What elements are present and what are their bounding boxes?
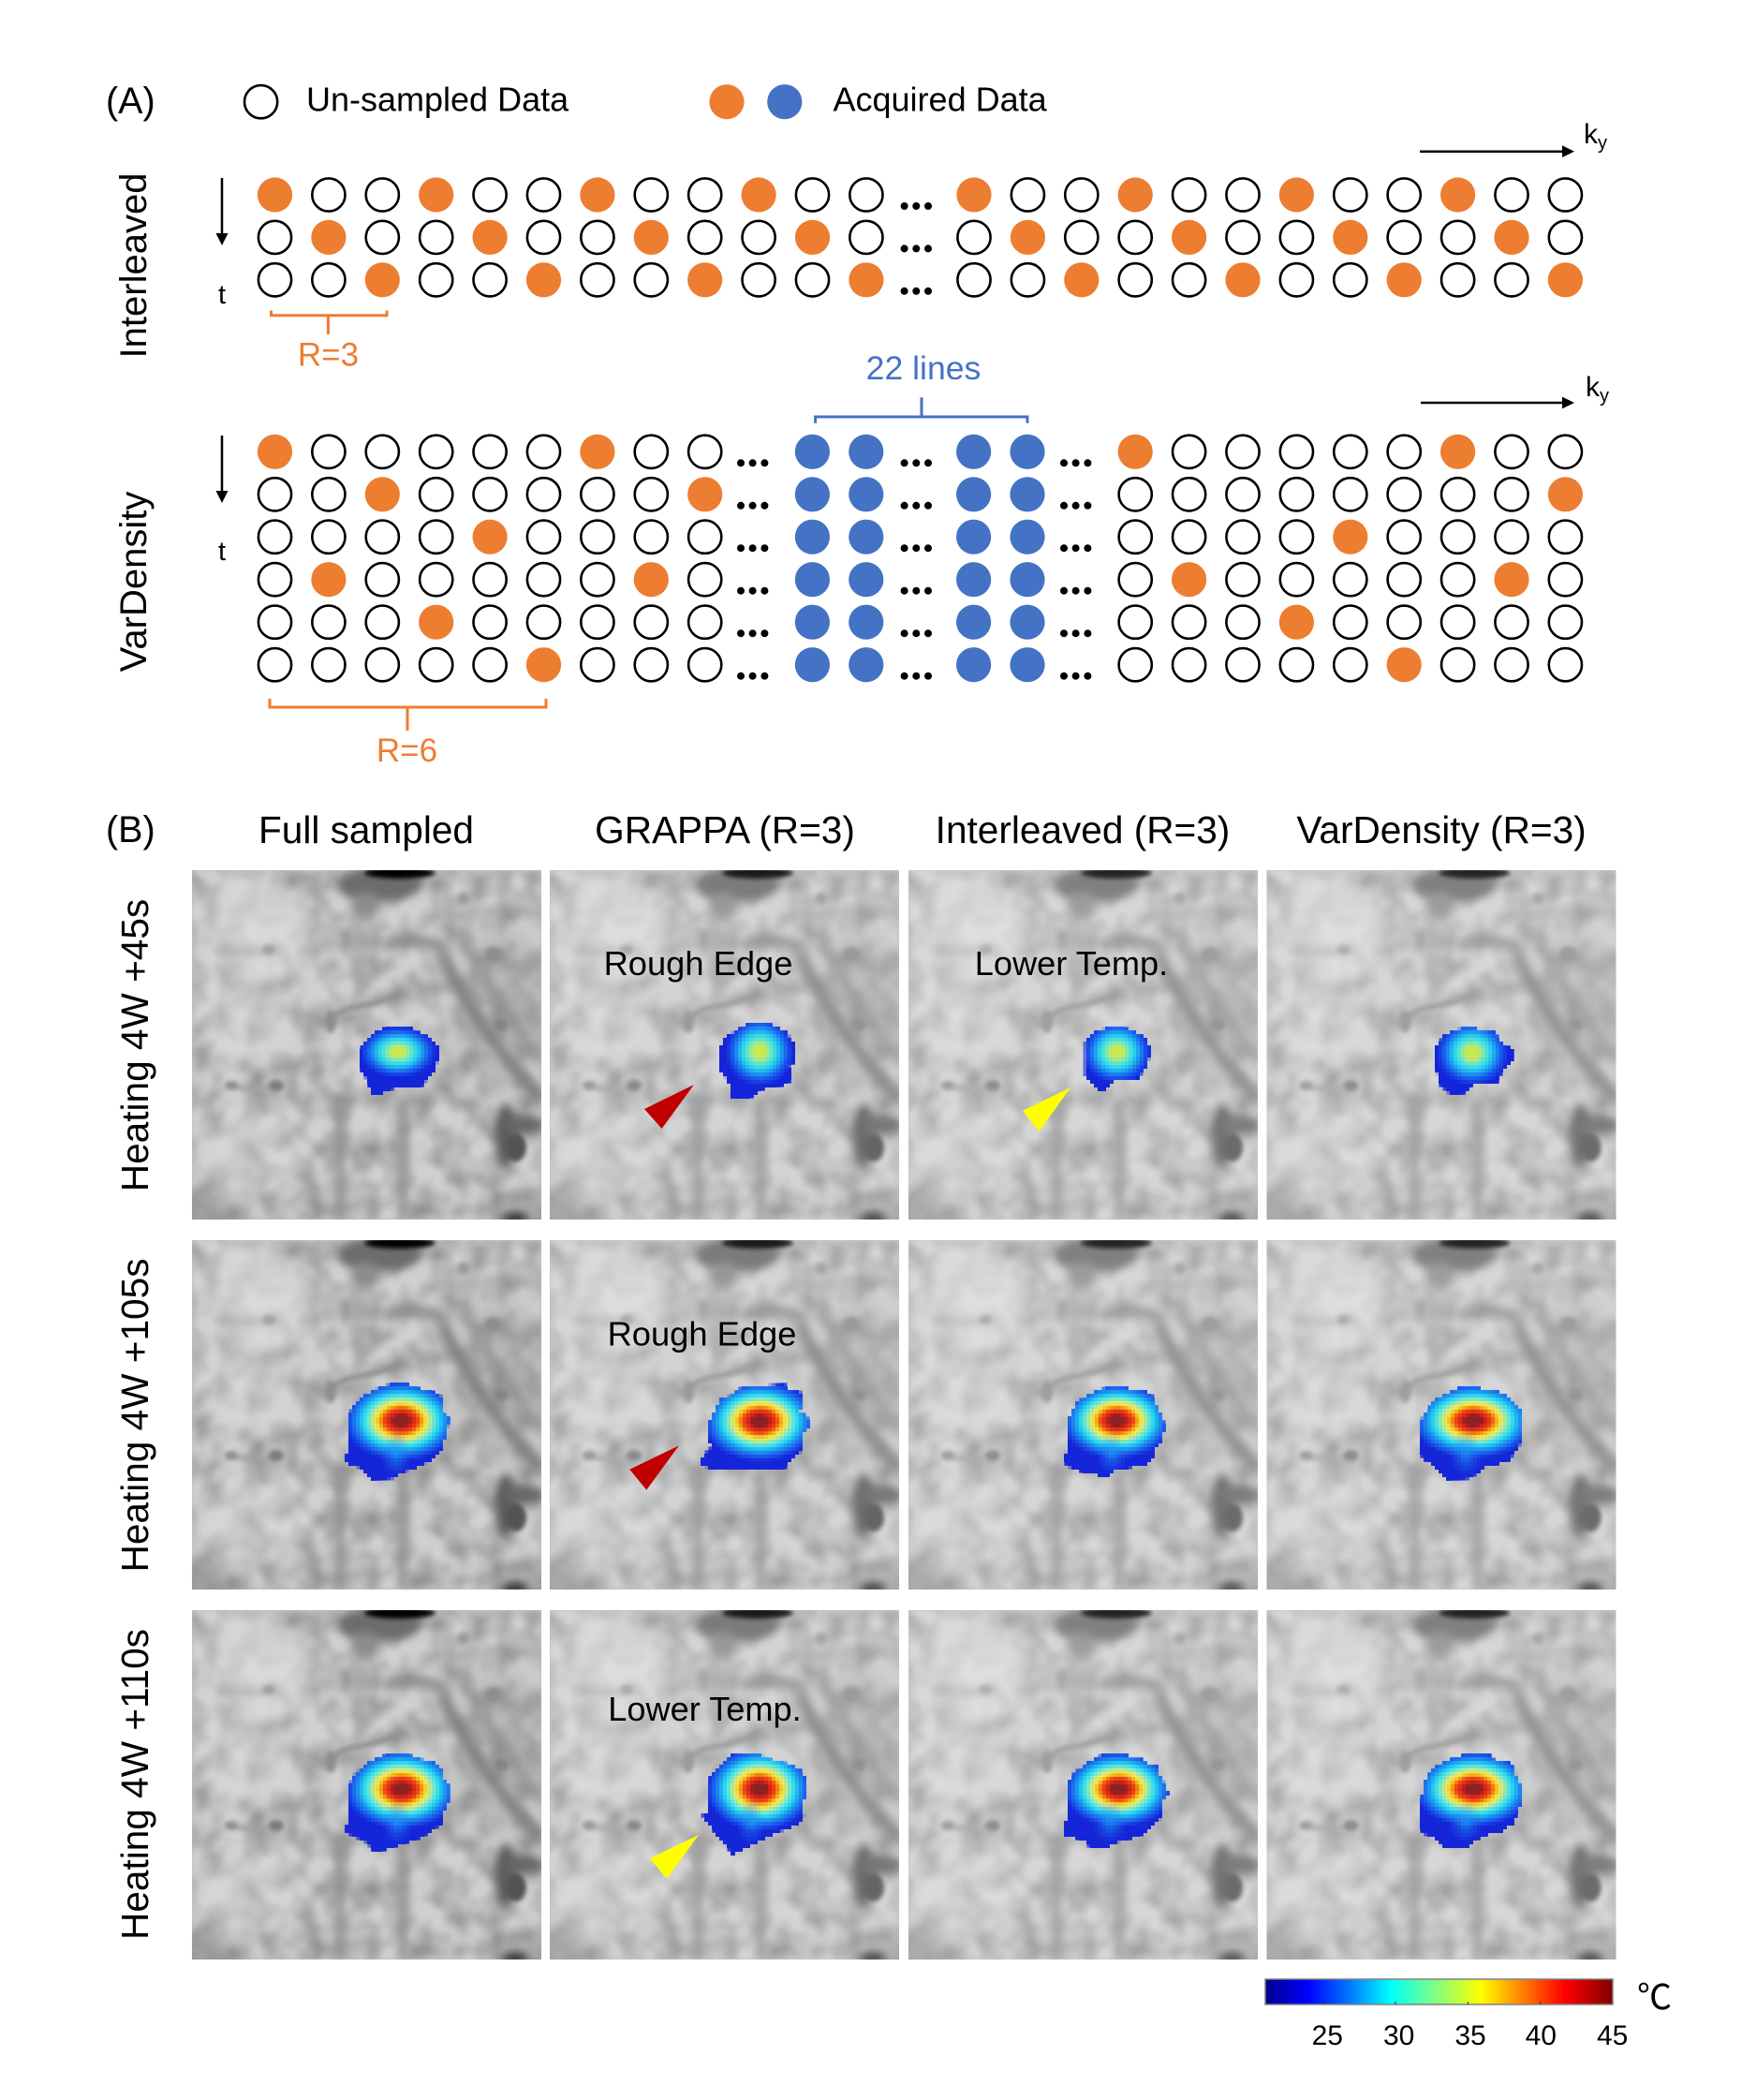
arrow: time axis xyxy=(215,178,229,310)
bracket: R=6 xyxy=(270,699,546,769)
heading: Heating 4W +45s: Heating 4W +45s xyxy=(113,899,156,1191)
colour ramp xyxy=(1265,1979,1613,2004)
image panel: +45s full sampled xyxy=(155,867,578,1242)
heading: Full sampled: Full sampled xyxy=(258,808,474,851)
heat map xyxy=(360,1028,437,1093)
heat map xyxy=(1085,1028,1151,1091)
legend: acquired data xyxy=(709,81,1048,119)
arrow: time axis: t xyxy=(218,280,226,310)
heat map xyxy=(719,1024,795,1100)
heading: VarDensity (R=3): VarDensity (R=3) xyxy=(1296,808,1587,851)
arrow: ky axis xyxy=(1421,372,1609,408)
panel label: (A): (A) xyxy=(106,81,155,122)
row label: Interleaved: Interleaved xyxy=(113,173,155,358)
bracket: R=6: R=6 xyxy=(376,732,437,769)
ellipsis dots xyxy=(741,463,1087,676)
arrowhead: yellow xyxy=(650,1835,699,1879)
heat map xyxy=(1420,1386,1523,1479)
annotation: Lower Temp.: Lower Temp. xyxy=(608,1690,802,1728)
heat map xyxy=(1065,1386,1165,1476)
bracket: 22 lines: 22 lines xyxy=(866,349,981,387)
heading: GRAPPA (R=3): GRAPPA (R=3) xyxy=(595,808,855,851)
annotation: Rough Edge: Rough Edge xyxy=(608,1315,796,1353)
image panel: +110s GRAPPA xyxy=(512,1607,936,1982)
row headings xyxy=(113,899,156,1940)
image panel: +45s GRAPPA xyxy=(512,867,936,1242)
annotation: Lower Temp.: Lower Temp. xyxy=(975,944,1168,983)
heading: Heating 4W +110s: Heating 4W +110s xyxy=(113,1629,156,1940)
legend xyxy=(244,81,1048,119)
image panel: +105s GRAPPA xyxy=(512,1237,936,1612)
image panel: +110s Interleaved xyxy=(871,1607,1294,1982)
bracket: 22 lines xyxy=(816,349,1027,423)
arrow: ky axis: y xyxy=(1600,386,1609,407)
image panel: +110s full sampled xyxy=(155,1607,578,1982)
heat map xyxy=(1420,1755,1523,1848)
arrow: ky axis: k xyxy=(1584,119,1598,150)
interleaved row 3 xyxy=(258,262,1583,297)
fully acquired central block xyxy=(795,435,1045,682)
colour bar labels xyxy=(1312,2020,1628,2051)
heat map xyxy=(1066,1755,1168,1848)
legend: un-sampled data: Un-sampled Data xyxy=(306,81,569,118)
image panel: +45s Interleaved xyxy=(871,867,1294,1242)
interleaved row 2 xyxy=(258,220,1582,255)
legend: acquired data: Acquired Data xyxy=(834,81,1048,118)
image panel: +45s VarDensity xyxy=(1229,867,1652,1242)
panel label: (B): (B) xyxy=(106,809,155,850)
interleaved row 1 xyxy=(258,177,1582,213)
colour bar xyxy=(1265,1978,1672,2051)
colour bar labels: 35 xyxy=(1454,2020,1486,2051)
image panel: +105s VarDensity xyxy=(1229,1237,1652,1612)
colour bar labels: 45 xyxy=(1597,2020,1628,2051)
bracket: R=3: R=3 xyxy=(298,337,359,373)
arrow: time axis xyxy=(215,436,229,567)
ellipsis dots xyxy=(905,206,928,291)
heat map xyxy=(346,1383,449,1479)
arrow: ky axis: y xyxy=(1598,133,1607,154)
heat map xyxy=(1437,1028,1513,1093)
image panel: +110s VarDensity xyxy=(1229,1607,1652,1982)
arrowhead: red xyxy=(644,1085,694,1129)
annotation: Rough Edge: Rough Edge xyxy=(604,944,792,983)
arrow: ky axis: k xyxy=(1586,372,1600,403)
panel: interleaved sampling pattern xyxy=(113,119,1607,373)
arrow: ky axis xyxy=(1420,119,1607,157)
row label: VarDensity: VarDensity xyxy=(113,492,155,672)
un-sampled right block xyxy=(1118,435,1583,682)
heat map xyxy=(702,1753,806,1855)
column headings xyxy=(258,808,1587,851)
image panel: +105s full sampled xyxy=(155,1237,578,1612)
bracket: R=3 xyxy=(272,311,387,373)
colour bar ticks xyxy=(1323,2002,1541,2004)
image panel: +105s Interleaved xyxy=(871,1237,1294,1612)
heat map xyxy=(345,1753,449,1852)
heading: Interleaved (R=3): Interleaved (R=3) xyxy=(936,808,1230,851)
arrowhead: yellow xyxy=(1023,1087,1070,1131)
panel: variable density sampling pattern xyxy=(113,349,1609,769)
colour bar labels: 40 xyxy=(1526,2020,1557,2051)
unit label: ℃ xyxy=(1637,1978,1672,2017)
colour bar labels: 25 xyxy=(1312,2020,1343,2051)
arrow: time axis: t xyxy=(218,537,226,567)
colour bar labels: 30 xyxy=(1383,2020,1414,2051)
un-sampled left block xyxy=(258,435,722,682)
arrowhead: red xyxy=(629,1445,679,1490)
heading: Heating 4W +105s: Heating 4W +105s xyxy=(113,1259,156,1572)
heat map xyxy=(701,1384,809,1469)
